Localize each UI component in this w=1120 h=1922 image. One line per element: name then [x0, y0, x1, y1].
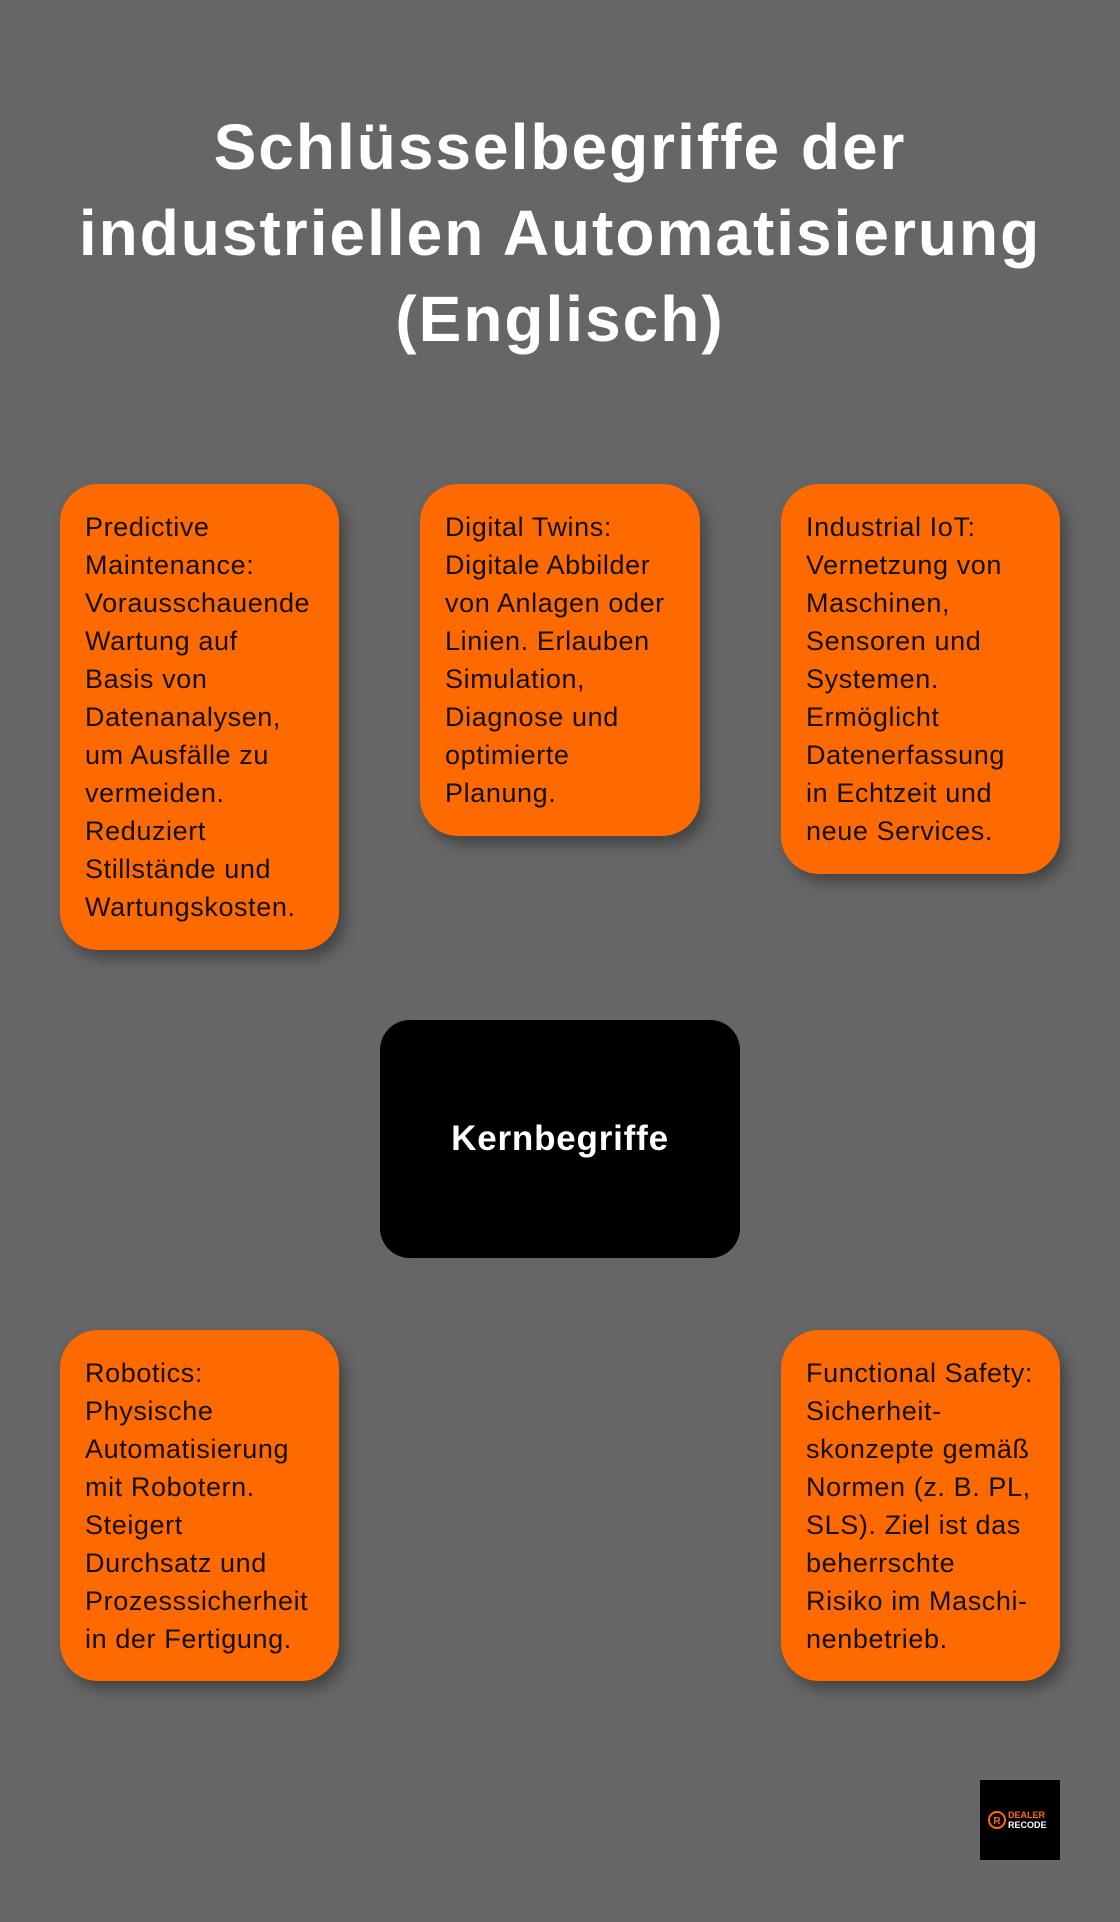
panel: digital twins: Simulation,	[445, 664, 585, 694]
panel: functional safety	[781, 1330, 1060, 1681]
panel: digital twins: Digitale Abbilder	[445, 550, 650, 580]
panel: robotics: Steigert	[85, 1510, 183, 1540]
panel: predictive maintenance: vermeiden.	[85, 778, 225, 808]
panel: predictive maintenance: Vorausschauende	[85, 588, 310, 618]
panel: predictive maintenance: Datenanalysen,	[85, 702, 281, 732]
panel: industrial iot: Industrial IoT:	[806, 512, 976, 542]
panel: predictive maintenance: Reduziert	[85, 816, 206, 846]
panel: robotics: Robotics:	[85, 1358, 203, 1388]
panel: digital twins: optimierte	[445, 740, 570, 770]
panel: functional safety: Normen (z. B. PL,	[806, 1472, 1031, 1502]
panel: digital twins: Digital Twins:	[445, 512, 612, 542]
panel: industrial iot: Maschinen,	[806, 588, 950, 618]
panel: functional safety: Functional Safety:	[806, 1358, 1033, 1388]
panel: robotics: in der Fertigung.	[85, 1624, 292, 1654]
logo: dealer recode	[980, 1780, 1060, 1860]
panel: predictive maintenance: Stillstände und	[85, 854, 271, 884]
panel: predictive maintenance: Basis von	[85, 664, 207, 694]
panel: functional safety: Sicherheit-	[806, 1396, 942, 1426]
center node: Kernbegriffe: Kernbegriffe	[451, 1119, 669, 1158]
panel: robotics: Prozesssicherheit	[85, 1586, 308, 1616]
panel: predictive maintenance	[60, 484, 339, 950]
title	[79, 111, 1041, 355]
panel: industrial iot	[781, 484, 1060, 874]
panel: robotics: Durchsatz und	[85, 1548, 267, 1578]
logo: dealer recode: R	[993, 1816, 1001, 1827]
panel: digital twins: Planung.	[445, 778, 556, 808]
title: Schlüsselbegriffe der	[214, 111, 906, 183]
panel: robotics: mit Robotern.	[85, 1472, 255, 1502]
logo: dealer recode: RECODE	[1008, 1820, 1047, 1830]
panel: predictive maintenance: Wartungskosten.	[85, 892, 296, 922]
panel: digital twins: Linien. Erlauben	[445, 626, 650, 656]
panel: industrial iot: Ermöglicht	[806, 702, 940, 732]
panel: predictive maintenance: Maintenance:	[85, 550, 254, 580]
panel: industrial iot: Sensoren und	[806, 626, 981, 656]
panel: robotics	[60, 1330, 339, 1681]
panel: robotics: Physische	[85, 1396, 213, 1426]
panel: industrial iot: Vernetzung von	[806, 550, 1002, 580]
panel: functional safety: nenbetrieb.	[806, 1624, 948, 1654]
title: industriellen Automatisierung	[79, 197, 1041, 269]
panel: functional safety: Risiko im Maschi-	[806, 1586, 1028, 1616]
center node: Kernbegriffe	[380, 1020, 740, 1258]
panel: industrial iot: neue Services.	[806, 816, 993, 846]
panel: functional safety: SLS). Ziel ist das	[806, 1510, 1021, 1540]
panel: predictive maintenance: Wartung auf	[85, 626, 238, 656]
panel: digital twins	[420, 484, 700, 836]
panel: digital twins: Diagnose und	[445, 702, 619, 732]
panel: industrial iot: Systemen.	[806, 664, 939, 694]
panel: functional safety: beherrschte	[806, 1548, 955, 1578]
panel: digital twins: von Anlagen oder	[445, 588, 665, 618]
panel: predictive maintenance: um Ausfälle zu	[85, 740, 269, 770]
title: (Englisch)	[395, 283, 725, 355]
panel: industrial iot: in Echtzeit und	[806, 778, 992, 808]
panel: industrial iot: Datenerfassung	[806, 740, 1005, 770]
panel: robotics: Automatisierung	[85, 1434, 289, 1464]
panel: functional safety: skonzepte gemäß	[806, 1434, 1030, 1464]
logo: dealer recode: DEALER	[1008, 1810, 1046, 1820]
panel: predictive maintenance: Predictive	[85, 512, 210, 542]
